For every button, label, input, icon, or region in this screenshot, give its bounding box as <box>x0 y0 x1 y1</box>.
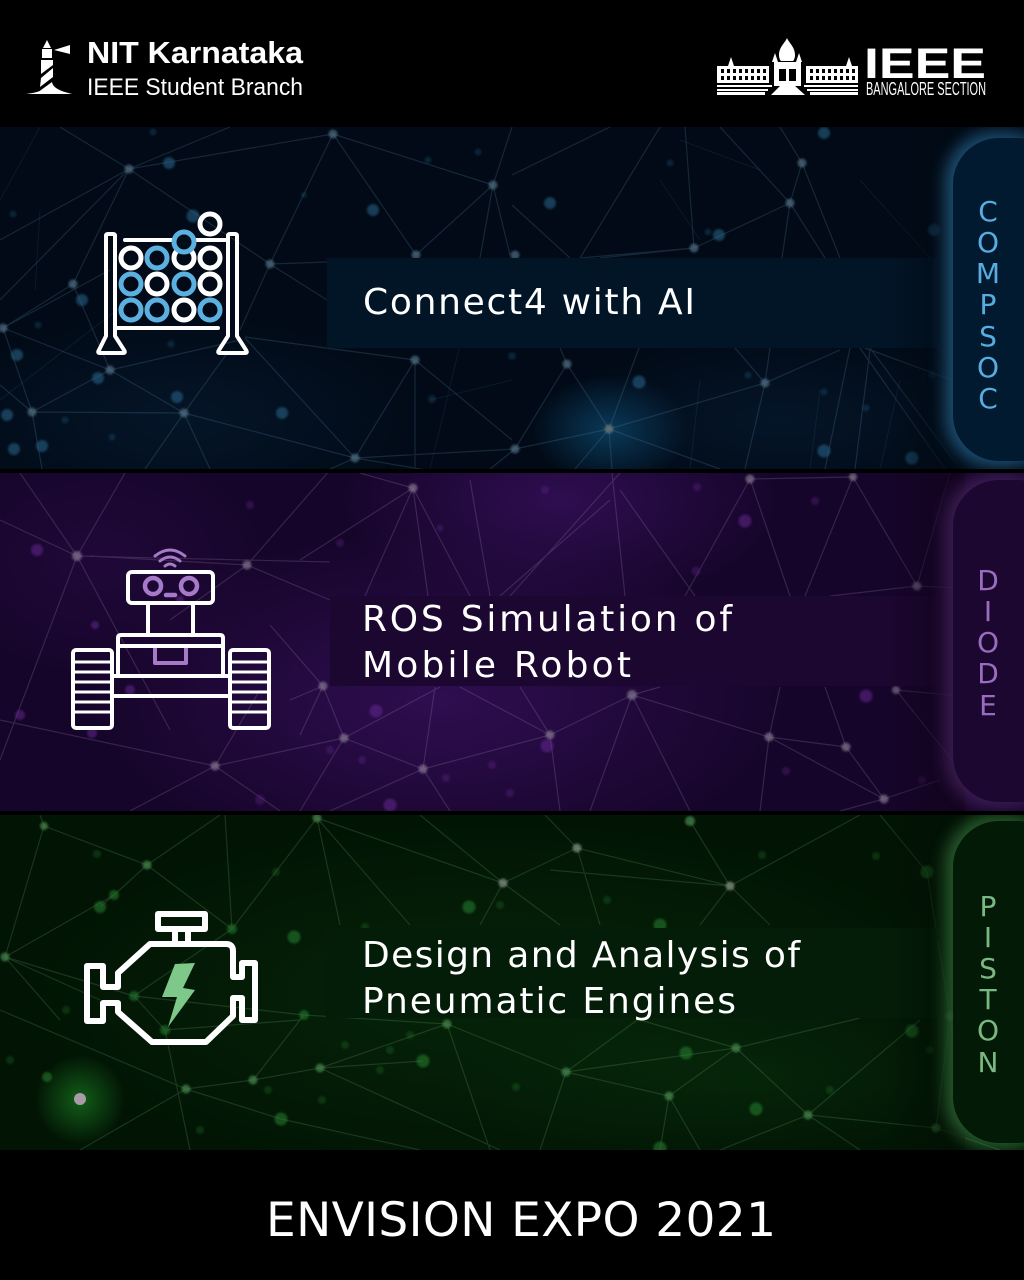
icon: Bangalore Vidhana Soudha building <box>717 38 858 95</box>
network nodes <box>6 850 934 1154</box>
tab: DIODE: E <box>979 689 997 722</box>
network nodes <box>15 483 926 812</box>
icon: lighthouse logo <box>26 40 72 94</box>
panel: PISTON <box>0 815 1024 1150</box>
tab: COMPSOC: M <box>976 257 1000 290</box>
tab: COMPSOC: S <box>979 320 997 353</box>
tab: PISTON: I <box>984 921 992 954</box>
tab: COMPSOC: C <box>978 195 998 228</box>
tab: COMPSOC: P <box>980 288 996 321</box>
tab: DIODE <box>885 473 1024 811</box>
icon: engine <box>87 914 255 1042</box>
text bar <box>327 258 938 348</box>
tab: PISTON: S <box>979 952 997 985</box>
icon: Connect 4 board <box>98 214 247 353</box>
tab: COMPSOC: O <box>977 351 999 384</box>
tab: PISTON: N <box>978 1046 998 1079</box>
tab: DIODE: I <box>984 595 992 628</box>
icon: lightning bolt <box>162 963 195 1027</box>
network lines <box>0 127 960 469</box>
highlighted node <box>74 1093 86 1105</box>
tab: COMPSOC <box>885 127 1024 469</box>
tab: DIODE: O <box>977 626 999 659</box>
network nodes <box>1 127 940 464</box>
project title: Pneumatic Engines <box>362 981 736 1022</box>
network lines <box>0 470 960 811</box>
logo text: IEEE Student Branch: IEEE Student Branch <box>87 74 303 101</box>
tab: COMPSOC: C <box>978 382 998 415</box>
panel: DIODE <box>0 473 1024 811</box>
icon: mobile robot <box>73 550 269 728</box>
network lines <box>0 815 1000 1150</box>
tab: DIODE: D <box>977 657 999 690</box>
project title: Mobile Robot <box>362 645 631 686</box>
text bar <box>326 928 938 1022</box>
footer title: ENVISION EXPO 2021 <box>266 1193 776 1248</box>
logo text: IEEE: IEEE <box>864 40 986 88</box>
header <box>26 35 986 101</box>
project title: Connect4 with AI <box>363 282 695 323</box>
project title <box>362 935 801 1022</box>
project title: ROS Simulation of <box>362 599 733 640</box>
tab: DIODE: D <box>977 564 999 597</box>
tab: PISTON: O <box>977 1014 999 1047</box>
project title: Design and Analysis of <box>362 935 801 976</box>
tab: COMPSOC: O <box>977 226 999 259</box>
logo text: NIT Karnataka: NIT Karnataka <box>87 35 304 70</box>
panel: COMPSOC <box>0 127 1024 469</box>
project title <box>366 604 733 678</box>
tab: PISTON <box>902 815 1024 1150</box>
tab: PISTON: P <box>980 890 996 923</box>
tab: PISTON: T <box>978 983 997 1016</box>
text bar <box>330 596 938 686</box>
